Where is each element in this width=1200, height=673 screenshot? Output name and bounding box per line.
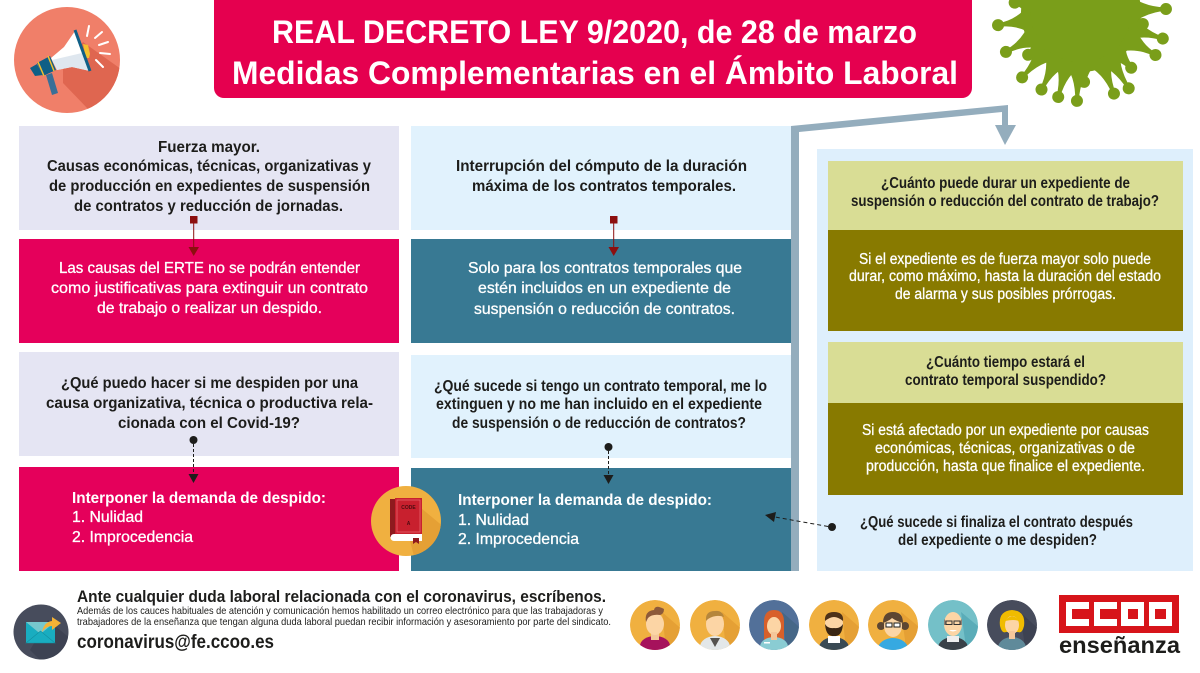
answer: tiempo suspendido [828,403,1183,495]
panel: fuerza mayor: de contratos y reducción de jornadas. [74,198,343,215]
question: finaliza el contrato [860,514,1133,549]
answer: duracion expediente: Si el expediente es de fuerza mayor solo puede [859,251,1151,268]
question: finaliza el contrato: ¿Qué sucede si finaliza el contrato después [860,514,1133,531]
panel: pregunta despido [19,352,399,456]
footer text: coronavirus@fe.ccoo.es [77,632,274,653]
panel: pregunta contrato temporal: de suspensión o de reducción de contratos? [452,415,746,432]
panel: pregunta despido: cionada con el Covid-19? [118,415,300,432]
panel: contratos temporales: Solo para los contratos temporales que [468,260,742,277]
panel: interrupcion del computo: máxima de los contratos temporales. [472,178,736,195]
answer: tiempo suspendido: Si está afectado por un expediente por causas [862,422,1149,439]
avatars row [630,600,1037,650]
question: tiempo suspendido: contrato temporal suspendido? [905,372,1106,389]
panel: demanda de despido izquierda [19,467,399,571]
panel: demanda de despido izquierda: 1. Nulidad [72,509,143,526]
footer text: trabajadores de la enseñanza que tengan alguna duda laboral puedan recibir información y asesoramiento por parte del sindicato. [77,616,611,628]
icon: megaphone [14,7,120,113]
logo: CCOO ensenanza [1059,595,1180,658]
footer text: Además de los cauces habituales de atención y comunicación hemos habilitado un correo electrónico para que las trabajadoras y [77,605,604,617]
arrow: interrupcion to contratos [608,216,619,256]
answer: duracion expediente: durar, como máximo, hasta la duración del estado [849,268,1161,285]
avatar: bald man glasses [928,600,978,650]
panel: pregunta contrato temporal: ¿Qué sucede si tengo un contrato temporal, me lo [434,378,767,395]
avatar: woman glasses [868,600,918,650]
icon: law book [371,486,441,556]
panel: right column [817,149,1193,571]
panel: demanda de despido izquierda: Interponer la demanda de despido: [72,490,326,507]
avatar: bearded man [809,600,859,650]
arrow: pregunta to demanda izquierda [188,436,198,483]
logo: CCOO ensenanza: enseñanza [1059,632,1180,658]
panel: demanda de despido izquierda: 2. Improcedencia [72,529,193,546]
avatar: blonde woman [987,600,1037,650]
panel: causas del ERTE: Las causas del ERTE no se podrán entender [59,260,361,277]
panel: fuerza mayor: Fuerza mayor. [158,139,260,156]
avatar: red hair woman [749,600,799,650]
footer text: Ante cualquier duda laboral relacionada con el coronavirus, escríbenos. [77,587,606,606]
title banner: Medidas Complementarias en el Ámbito Laboral [232,55,958,91]
question: finaliza el contrato: del expediente o me despiden? [898,532,1097,549]
title banner [214,0,972,98]
panel: demanda de despido centro: Interponer la demanda de despido: [458,492,712,509]
title banner: REAL DECRETO LEY 9/2020, de 28 de marzo [272,14,917,50]
panel: pregunta contrato temporal: extinguen y no me han incluido en el expediente [436,396,762,413]
panel: contratos temporales [411,239,791,343]
panel: interrupcion del computo [411,126,791,230]
panel: pregunta contrato temporal [411,355,791,458]
panel: fuerza mayor [19,126,399,230]
avatar: man white coat [690,600,740,650]
panel: interrupcion del computo: Interrupción del cómputo de la duración [456,158,747,175]
panel: demanda de despido centro: 1. Nulidad [458,512,529,529]
panel: causas del ERTE [19,239,399,343]
question: tiempo suspendido: ¿Cuánto tiempo estará el [926,354,1085,371]
answer: tiempo suspendido: económicas, técnicas, organizativas o de [875,440,1135,457]
icon: law book: CODE [401,505,416,511]
panel: demanda de despido centro: 2. Improcedencia [458,531,579,548]
arrow: connector line to right panel [791,105,1016,571]
panel: contratos temporales: estén incluidos en un expediente de [478,280,731,297]
panel: causas del ERTE: de trabajo o realizar un despido. [97,300,322,317]
panel: contratos temporales: suspensión o reducción de contratos. [474,301,735,318]
answer: tiempo suspendido: producción, hasta que finalice el expediente. [866,458,1145,475]
panel: causas del ERTE: como justificativas para extinguir un contrato [51,280,368,297]
icon: email [14,604,68,660]
answer: duracion expediente [828,230,1183,331]
icon: law book: A [407,521,411,527]
avatar: woman magenta [630,600,680,650]
answer: duracion expediente: de alarma y sus posibles prórrogas. [895,286,1116,303]
panel: fuerza mayor: Causas económicas, técnicas, organizativas y [47,158,371,175]
question: duracion expediente: ¿Cuánto puede durar un expediente de [881,175,1130,192]
question: tiempo suspendido [828,342,1183,403]
footer text [77,587,611,653]
question: duracion expediente [828,161,1183,230]
arrow: finaliza contrato to demanda [765,512,836,531]
arrow: pregunta to demanda centro [604,443,614,484]
panel: fuerza mayor: de producción en expedientes de suspensión [49,178,370,195]
panel: pregunta despido: causa organizativa, técnica o productiva rela- [46,395,373,412]
arrow: fuerza mayor to causas [188,216,199,256]
panel: pregunta despido: ¿Qué puedo hacer si me despiden por una [61,375,358,392]
question: duracion expediente: suspensión o reducción del contrato de trabajo? [851,193,1159,210]
icon: virus [990,0,1173,108]
panel: demanda de despido centro [411,468,791,571]
